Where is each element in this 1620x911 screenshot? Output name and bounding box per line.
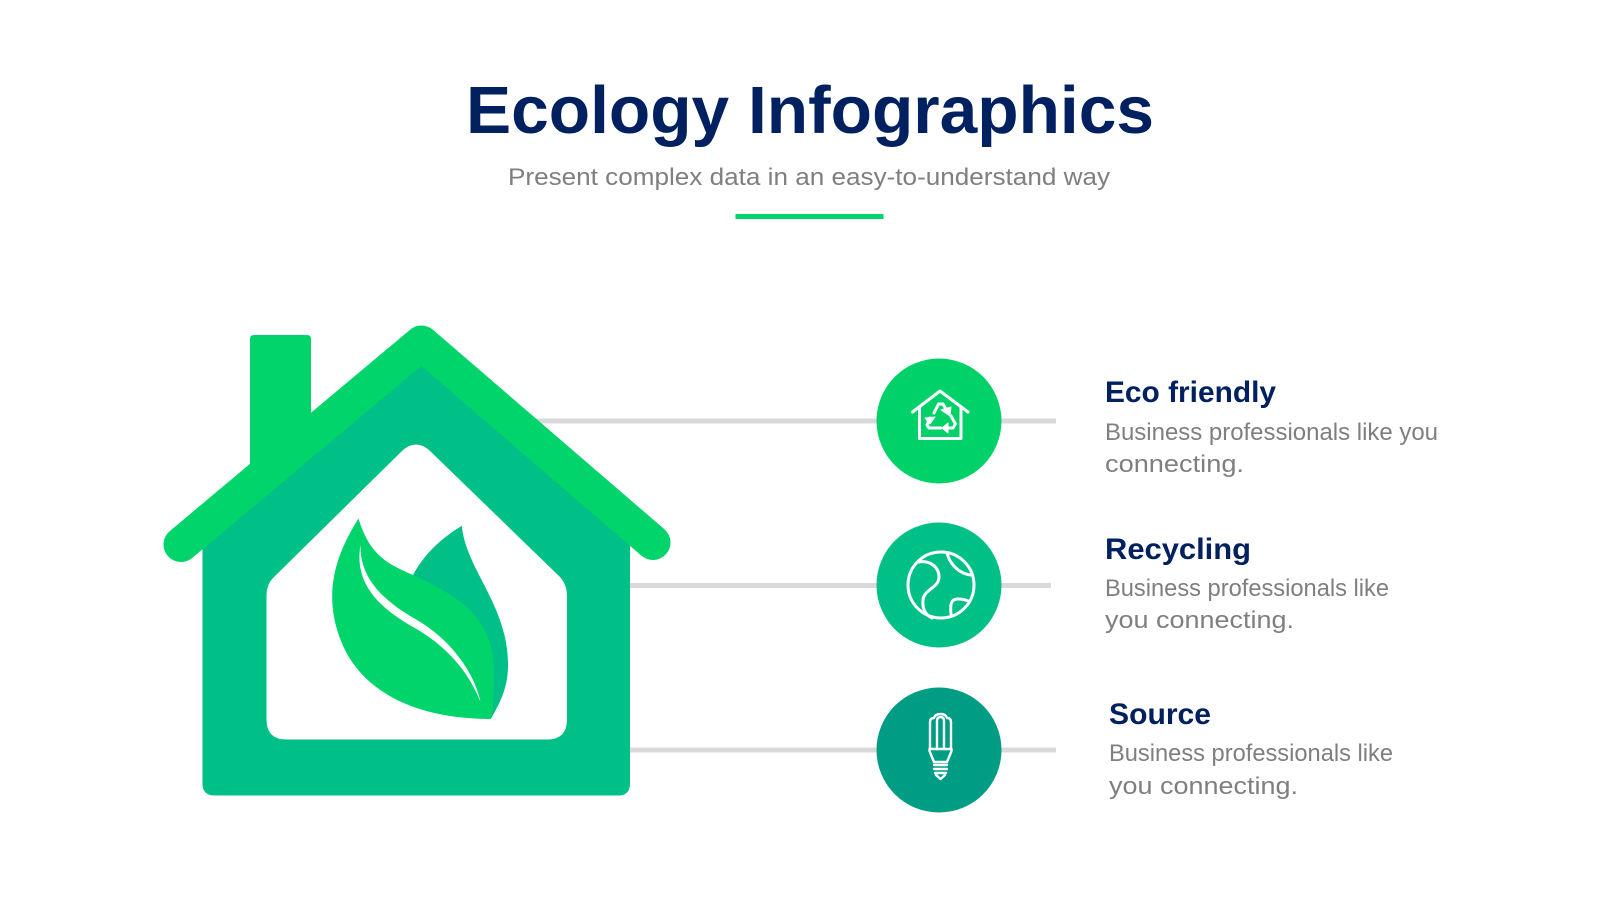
- node: recycling: [876, 522, 1002, 648]
- heading: Recycling: [1105, 533, 1251, 566]
- description: you connecting.: [1105, 607, 1294, 634]
- description: Business professionals like: [1105, 575, 1389, 602]
- roof: [181, 343, 653, 544]
- description: Business professionals like: [1109, 740, 1393, 767]
- circle: [876, 522, 1002, 648]
- icon: globe: [908, 552, 974, 618]
- text: eco friendly: [1105, 376, 1438, 478]
- circle: [876, 358, 1002, 484]
- description: connecting.: [1105, 451, 1244, 478]
- node: source: [876, 688, 1002, 812]
- connector lines: [500, 418, 1056, 752]
- back leaf: [413, 526, 508, 719]
- leaf vein: [359, 545, 480, 702]
- circle: [876, 688, 1002, 812]
- icon: recycling house: [912, 391, 968, 438]
- icon: light bulb: [930, 714, 952, 779]
- text: recycling: [1105, 533, 1389, 634]
- title underline: [736, 214, 884, 219]
- heading: Source: [1109, 698, 1211, 731]
- house illustration: [181, 335, 653, 796]
- chimney: [250, 335, 311, 480]
- title: Ecology Infographics: [466, 73, 1154, 148]
- description: Business professionals like you: [1105, 419, 1438, 446]
- text: source: [1109, 698, 1393, 800]
- house body: [202, 343, 630, 796]
- heading: Eco friendly: [1105, 376, 1276, 409]
- front leaf: [332, 519, 494, 719]
- description: you connecting.: [1109, 773, 1298, 800]
- node: eco friendly: [876, 358, 1002, 484]
- subtitle: Present complex data in an easy-to-understand way: [508, 164, 1110, 191]
